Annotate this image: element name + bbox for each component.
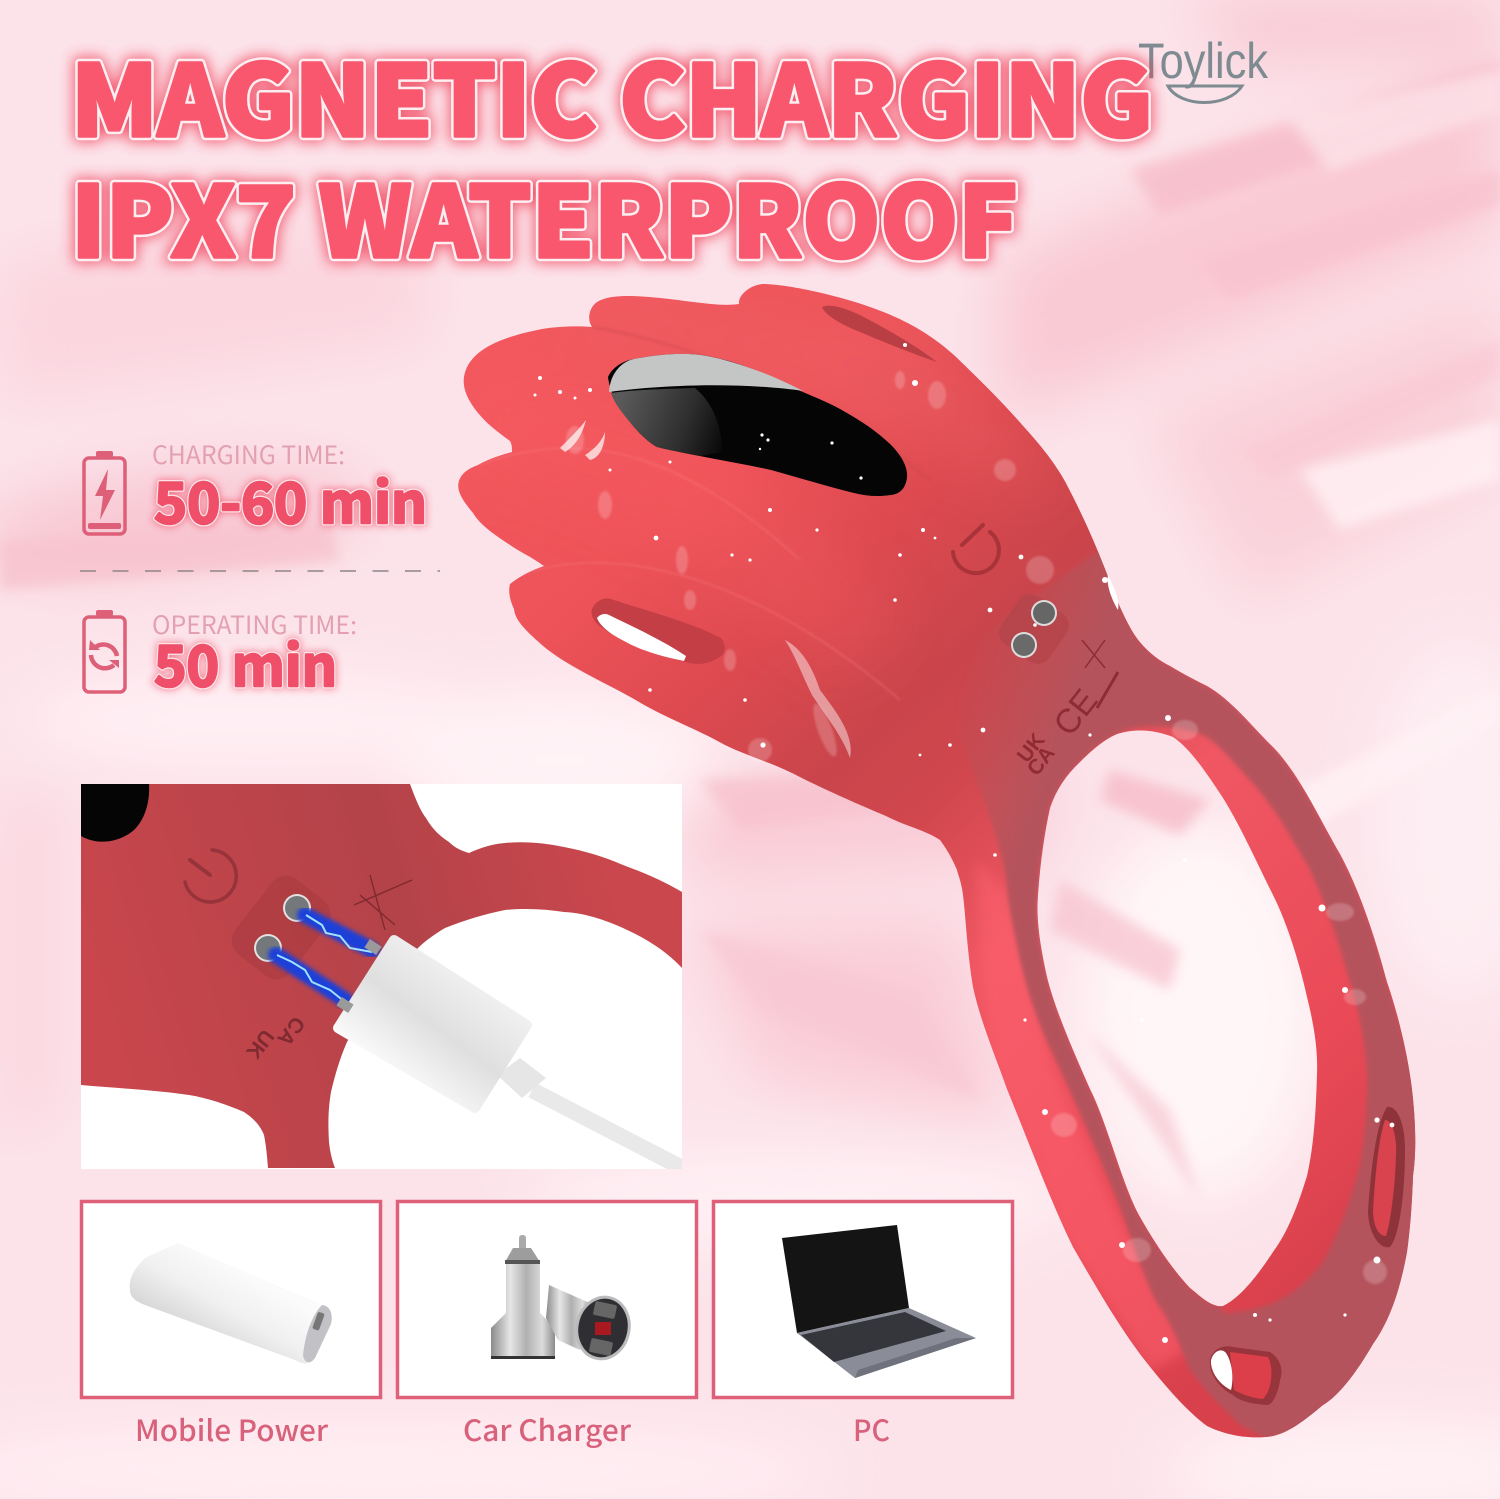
- icon: battery with lightning bolt: [84, 451, 125, 534]
- title: two-line heading: MAGNETIC CHARGING: [71, 23, 1153, 165]
- title: two-line heading: IPX7 WATERPROOF: [71, 144, 1018, 286]
- title: two-line heading: [71, 23, 1153, 286]
- icon: laptop: [782, 1225, 976, 1378]
- title: two-line heading: MAGNETIC CHARGING: [71, 23, 1153, 165]
- product: ring device body: [458, 284, 1420, 1442]
- slot: ring side: [1368, 1107, 1405, 1247]
- card: PC: PC: [853, 1408, 890, 1450]
- icon: power bank: [130, 1243, 332, 1363]
- card: car charger: Car Charger: [463, 1408, 631, 1450]
- certification marks: [1013, 640, 1118, 780]
- logo: Toylick: Toylick: [1138, 33, 1269, 89]
- slot: ring bottom: [1210, 1346, 1282, 1405]
- stat: operating time: [84, 606, 357, 703]
- icon: car chargers: [491, 1235, 635, 1364]
- certification marks: [241, 875, 412, 1063]
- certification marks: CE: [1046, 682, 1105, 743]
- water droplets: [534, 343, 1394, 1343]
- charging cable and plug: [336, 939, 690, 1172]
- stat: charging time: 50-60 min: [154, 459, 427, 540]
- certification marks: CA: [1023, 742, 1060, 780]
- certification marks: CA: [272, 1012, 309, 1050]
- stat: charging time: 50-60 min: [154, 459, 427, 540]
- certification marks: UK: [241, 1025, 278, 1063]
- slot: top of head: [822, 306, 937, 362]
- icon: power button: [953, 525, 999, 573]
- icon: battery with refresh arrows: [84, 610, 125, 692]
- certification marks: UK: [1013, 729, 1050, 767]
- stat: operating time: 50 min: [154, 622, 337, 703]
- inset: charging close-up photo: [81, 784, 690, 1172]
- stat: operating time: 50 min: [154, 622, 337, 703]
- ring flat face: [957, 550, 1420, 1442]
- card: car charger: [398, 1202, 696, 1450]
- title: two-line heading: IPX7 WATERPROOF: [71, 144, 1018, 286]
- card: PC: [714, 1202, 1012, 1450]
- stat: charging time: CHARGING TIME:: [152, 436, 345, 472]
- title: two-line heading: MAGNETIC CHARGING: [71, 23, 1153, 165]
- stat: operating time: OPERATING TIME:: [152, 606, 357, 642]
- card: mobile power: [82, 1202, 380, 1450]
- title: two-line heading: IPX7 WATERPROOF: [71, 144, 1018, 286]
- magnetic charging contacts: [994, 589, 1074, 669]
- display panel: [608, 354, 907, 496]
- stat: charging time: 50-60 min: [154, 459, 427, 540]
- stat: operating time: 50 min: [154, 622, 337, 703]
- charging contacts with lightning: [224, 869, 372, 1002]
- stat: charging time: [84, 436, 427, 540]
- icon: power button: [185, 850, 236, 902]
- card: mobile power: Mobile Power: [135, 1408, 328, 1450]
- slot: lower head: [591, 598, 725, 664]
- display corner: [81, 784, 149, 842]
